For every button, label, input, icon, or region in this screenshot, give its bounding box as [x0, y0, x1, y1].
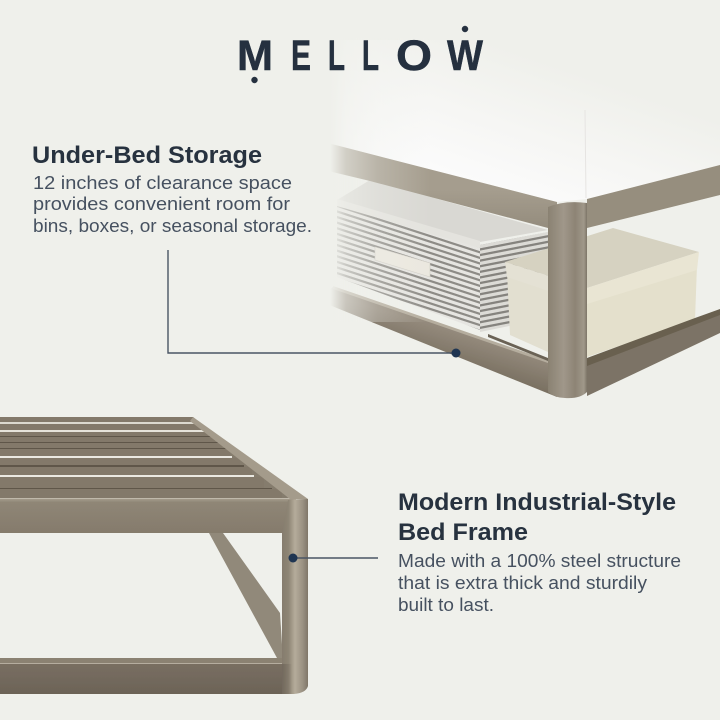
left fade — [300, 38, 430, 322]
bottom rail — [0, 658, 290, 694]
diagonal brace — [209, 533, 283, 660]
front rail — [0, 499, 296, 533]
lower rails — [317, 286, 720, 397]
slats — [0, 417, 290, 499]
callout leader: under-bed storage — [168, 250, 460, 358]
body: bed frame: Made with a 100% steel structure — [398, 551, 681, 571]
upper rails — [320, 141, 720, 228]
striped storage box — [337, 180, 548, 332]
heading: modern industrial-style bed frame — [398, 489, 676, 546]
brand logo: MELLOW: O — [396, 32, 432, 80]
heading: modern industrial-style bed frame: Modern Industrial-Style — [398, 489, 676, 516]
text block: bed frame — [398, 489, 681, 615]
side rail — [190, 417, 308, 499]
photo: bed frame side view — [0, 417, 308, 694]
photo: bed corner with storage boxes — [300, 38, 720, 398]
body: under-bed storage: provides convenient room for — [33, 194, 290, 214]
brand logo: MELLOW: L — [328, 32, 345, 80]
metal leg — [282, 499, 308, 694]
brand logo: MELLOW: E — [291, 32, 311, 80]
brand logo: MELLOW — [237, 26, 483, 83]
body: bed frame — [398, 551, 681, 615]
brand logo: MELLOW: W — [447, 32, 483, 80]
heading: under-bed storage: Under-Bed Storage — [32, 142, 262, 169]
slat deck backing — [0, 417, 290, 499]
metal corner leg — [548, 202, 587, 398]
body: bed frame: that is extra thick and sturdily — [398, 573, 647, 593]
mattress — [320, 40, 720, 202]
body: under-bed storage: 12 inches of clearance space — [33, 173, 292, 193]
body: bed frame: built to last. — [398, 595, 494, 615]
heading: modern industrial-style bed frame: Bed Frame — [398, 519, 528, 546]
callout leader: bed frame — [288, 554, 378, 562]
body: under-bed storage — [33, 173, 312, 236]
body: under-bed storage: bins, boxes, or seasonal storage. — [33, 216, 312, 236]
brand logo: MELLOW: M — [237, 32, 273, 80]
leg lower shade — [282, 664, 292, 694]
brand logo: MELLOW: L — [362, 32, 379, 80]
text block: under-bed storage — [32, 142, 312, 236]
linen storage box — [505, 228, 699, 357]
